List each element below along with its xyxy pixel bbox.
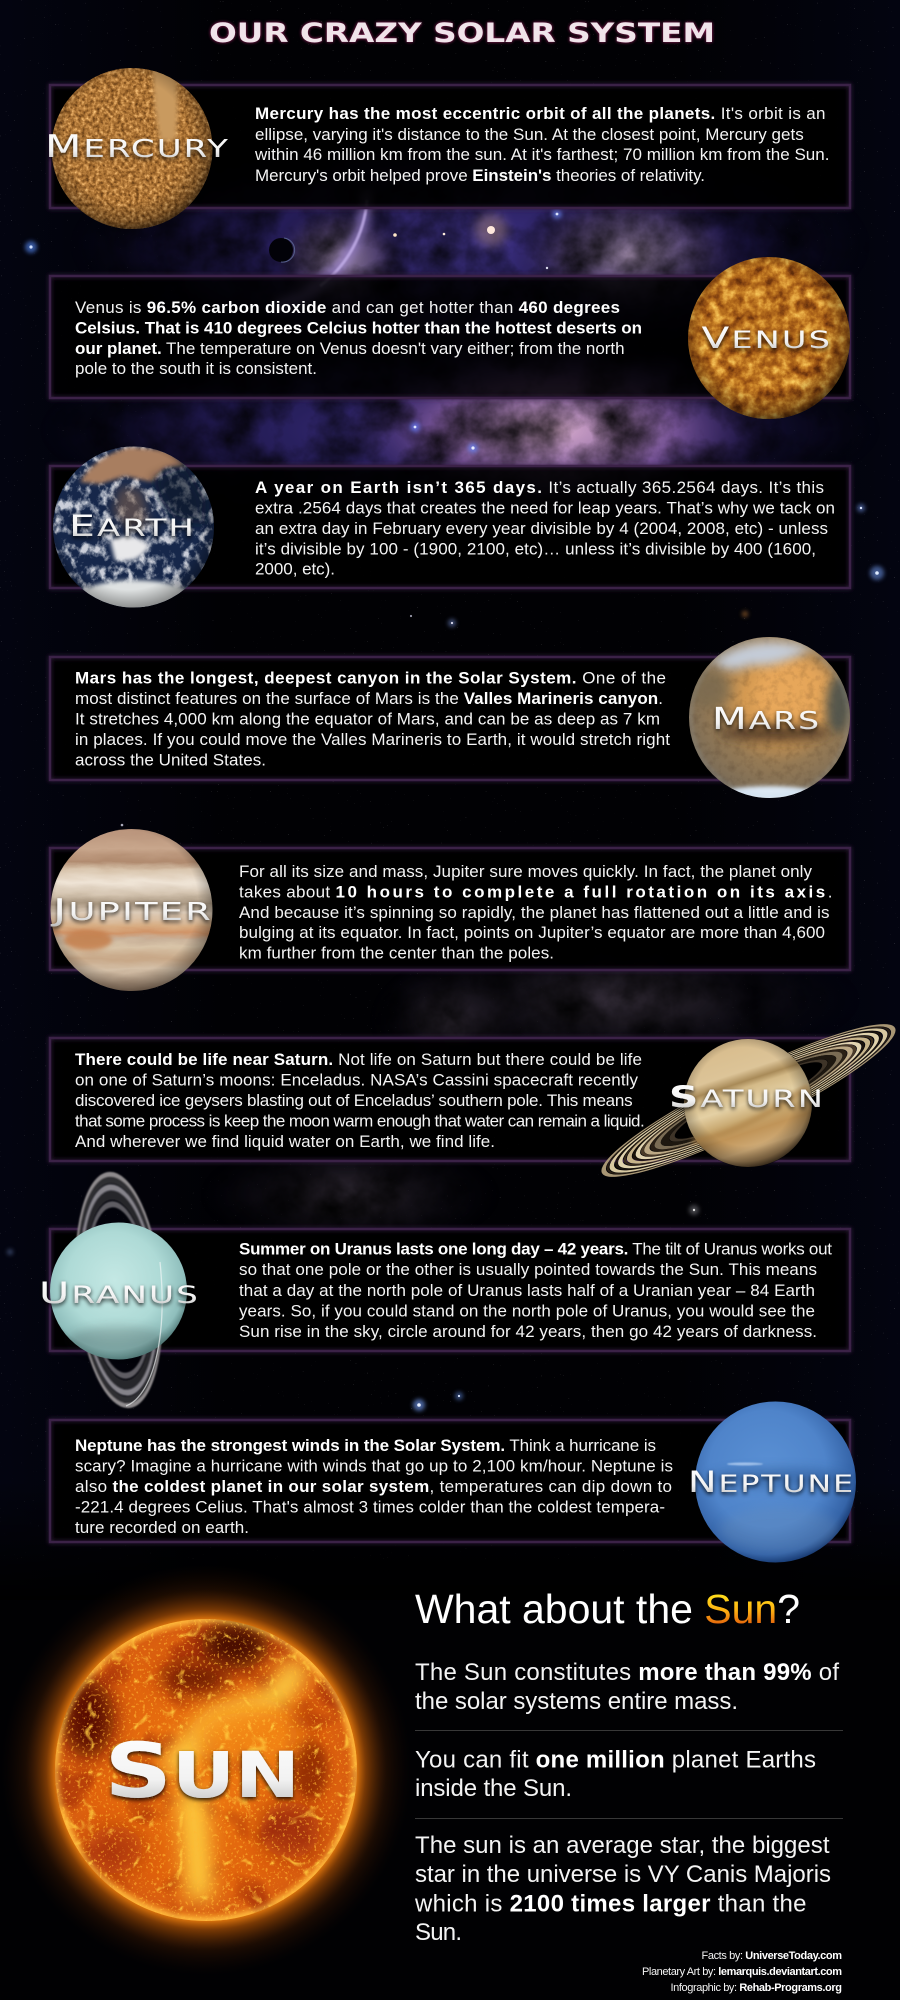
icon: Jupiter planet <box>50 829 212 991</box>
icon: Venus planet <box>688 256 850 420</box>
fact text: Saturn: discovered ice geysers blasting out of Enceladus’ southern pole. This means <box>75 1091 633 1110</box>
saturn rings <box>592 1005 900 1196</box>
saturn body <box>684 1039 812 1167</box>
panel: Jupiter <box>40 828 850 992</box>
label: Earth: E ARTH <box>69 509 196 543</box>
fact text: Venus: pole to the south it is consistent. <box>75 359 317 378</box>
icon: Saturn planet with rings <box>592 1005 900 1196</box>
fact text: Earth: A year on Earth isn’t 365 days. It’s actually 365.2564 days. It’s this <box>255 478 824 497</box>
label: Uranus: U RANUS <box>39 1276 200 1310</box>
fact text: Venus: Celsius. That is 410 degrees Celcius hotter than the hottest deserts on <box>75 318 642 338</box>
icon: Uranus planet with rings <box>50 1171 187 1409</box>
panel: Mercury <box>45 62 850 230</box>
panel: Neptune <box>50 1401 856 1563</box>
fact text: Jupiter: For all its size and mass, Jupiter sure moves quickly. In fact, the planet only <box>239 862 812 881</box>
sun surface <box>54 1618 358 1922</box>
fact: biggest star: which is 2100 times larger than the <box>414 1890 806 1918</box>
panel box <box>50 1038 850 1161</box>
fact text: Earth: it’s divisible by 100 - (1900, 2100, etc)… unless it’s divisible by 400 (1600, <box>255 540 816 558</box>
fact text: Neptune: Neptune has the strongest winds in the Solar System. Think a hurricane is <box>75 1436 656 1455</box>
fact text: Mars: most distinct features on the surface of Mars is the Valles Marineris canyon. <box>75 689 663 708</box>
credits: Infographic by: Rehab-Programs.org <box>670 1982 842 1994</box>
uranus rings <box>67 1171 171 1409</box>
crescent planet <box>269 190 367 306</box>
fact text: Jupiter: bulging at its equator. In fact, points on Jupiter’s equator are more than 4,600 <box>239 923 825 942</box>
fact: one million Earths <box>415 1746 816 1802</box>
fact text: Earth: an extra day in February every year divisible by 4 (2004, 2008, etc) - unless <box>255 519 828 538</box>
uranus body <box>50 1222 187 1360</box>
fact text: Saturn: There could be life near Saturn. Not life on Saturn but there could be life <box>75 1050 642 1069</box>
fact text: Mars: Mars has the longest, deepest canyon in the Solar System. One of the <box>75 668 666 688</box>
label: Sun: SUN <box>104 1726 300 1815</box>
panel box <box>50 657 850 780</box>
label: Mercury: M ERCURY <box>45 129 230 165</box>
fact text: Venus <box>75 298 642 378</box>
fact: Sun mass <box>415 1659 839 1715</box>
fact text: Neptune: -221.4 degrees Celius. That's almost 3 times colder than the coldest tempera- <box>75 1498 665 1516</box>
fact text: Saturn: And wherever we find liquid water on Earth, we find life. <box>75 1132 495 1151</box>
icon: Neptune planet <box>694 1401 856 1563</box>
fact text: Jupiter <box>239 862 832 962</box>
fact text: Mars: It stretches 4,000 km along the equator of Mars, and can be as deep as 7 km <box>75 710 660 728</box>
fact text: Mercury: Mercury has the most eccentric orbit of all the planets. It's orbit is an <box>255 104 826 123</box>
nebula between Mercury and Venus <box>40 120 880 1255</box>
fact text: Jupiter: takes about 10 hours to complete a full rotation on its axis. <box>239 882 832 902</box>
fact text: Uranus: so that one pole or the other is usually pointed towards the Sun. This means <box>239 1260 817 1279</box>
fact text: Uranus <box>239 1240 832 1341</box>
panel box <box>50 276 850 398</box>
panel box <box>50 848 850 970</box>
fact text: Neptune: scary? Imagine a hurricane with winds that go up to 2,100 km/hour. Neptune is <box>75 1456 673 1476</box>
heading: What about the Sun?: What about the Sun? <box>415 1586 800 1632</box>
fact: Sun mass: the solar systems entire mass. <box>415 1688 738 1715</box>
icon: Mars planet <box>688 636 851 804</box>
panel: Earth <box>50 446 850 620</box>
fact text: Earth <box>255 478 835 578</box>
fact: biggest star: star in the universe is VY Canis Majoris <box>415 1861 831 1888</box>
panel: Mars <box>50 636 851 804</box>
fact text: Venus: Venus is 96.5% carbon dioxide and can get hotter than 460 degrees <box>75 298 620 317</box>
panel box <box>50 466 850 588</box>
panel: Saturn <box>50 1005 900 1196</box>
fact text: Earth: extra .2564 days that creates the need for leap years. That’s why we tack on <box>255 498 835 518</box>
credits: Planetary Art by: lemarquis.deviantart.com <box>642 1966 842 1978</box>
fact text: Earth: 2000, etc). <box>255 560 335 578</box>
fact text: Saturn: on one of Saturn’s moons: Enceladus. NASA’s Cassini spacecraft recently <box>75 1070 638 1090</box>
fact text: Neptune <box>75 1436 673 1537</box>
fact text: Mercury: Mercury's orbit helped prove Einstein's theories of relativity. <box>255 166 705 185</box>
title: OUR CRAZY SOLAR SYSTEM <box>209 18 715 49</box>
panel box <box>50 1420 850 1542</box>
label: Venus: V ENUS <box>702 321 832 355</box>
fact text: Mercury: ellipse, varying it's distance to the Sun. At the closest point, Mercury gets <box>255 125 804 144</box>
fact text: Uranus: years. So, if you could stand on the north pole of Uranus, you would see the <box>239 1302 815 1320</box>
fact text: Mars: in places. If you could move the Valles Marineris to Earth, it would stretch right <box>75 730 670 749</box>
bright stars <box>7 209 884 1463</box>
fact: one million Earths: inside the Sun. <box>415 1775 572 1802</box>
label: Jupiter: JUPITER <box>50 893 213 928</box>
fact: biggest star <box>414 1832 831 1946</box>
fact text: Uranus: Summer on Uranus lasts one long day – 42 years. The tilt of Uranus works out <box>239 1240 832 1258</box>
panel: Venus <box>50 256 850 420</box>
icon: Mercury planet <box>51 62 213 230</box>
fact: Sun mass: The Sun constitutes more than 99% of <box>415 1659 839 1686</box>
fact: biggest star: Sun. <box>415 1919 462 1946</box>
fact text: Mercury <box>254 104 830 185</box>
panel box <box>50 85 850 208</box>
fact text: Uranus: that a day at the north pole of Uranus lasts half of a Uranian year – 84 Earth <box>239 1281 815 1300</box>
sun glow <box>1 1565 411 1975</box>
fact text: Mercury: within 46 million km from the sun. At it's farthest; 70 million km from the Sun. <box>254 145 830 164</box>
fact: biggest star: The sun is an average star, the biggest <box>415 1832 830 1859</box>
fact text: Neptune: ture recorded on earth. <box>75 1518 249 1537</box>
fact text: Saturn: that some process is keep the moon warm enough that water can remain a liquid. <box>75 1112 645 1130</box>
fact text: Neptune: also the coldest planet in our solar system, temperatures can dip down to <box>75 1477 672 1496</box>
label: Neptune: N EPTUNE <box>688 1465 855 1499</box>
fact text: Jupiter: And because it’s spinning so rapidly, the planet has flattened out a little and is <box>239 903 830 922</box>
panel: Uranus <box>39 1171 850 1409</box>
icon: Sun <box>12 1576 400 1964</box>
icon: Earth planet <box>52 446 214 620</box>
fact text: Mars <box>75 668 670 770</box>
label: Mars: M ARS <box>712 702 821 737</box>
panel box <box>50 1229 850 1351</box>
credits: Facts by: UniverseToday.com <box>702 1950 842 1962</box>
fact text: Saturn <box>75 1050 645 1151</box>
label: Saturn: S ATURN <box>669 1080 825 1114</box>
fact text: Jupiter: km further from the center than the poles. <box>239 944 554 962</box>
credits <box>642 1950 842 1994</box>
fact: one million Earths: You can fit one million planet Earths <box>415 1746 816 1774</box>
sun facts <box>414 1586 843 1946</box>
fact text: Uranus: Sun rise in the sky, circle around for 42 years, then go 42 years of darkness. <box>239 1322 817 1341</box>
fact text: Mars: across the United States. <box>75 750 266 770</box>
fact text: Venus: our planet. The temperature on Venus doesn't vary either; from the north <box>75 339 625 358</box>
